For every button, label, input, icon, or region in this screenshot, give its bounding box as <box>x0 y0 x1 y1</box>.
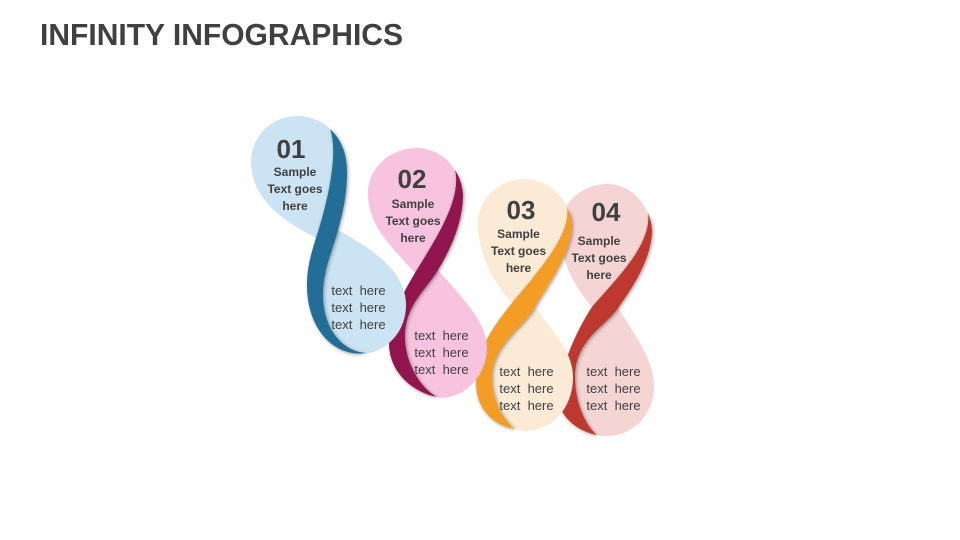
number 04: 04 <box>592 197 621 227</box>
body text 01 <box>331 283 386 332</box>
infinity 01 <box>251 116 406 354</box>
number 01: 01 <box>277 134 305 164</box>
heading 04: here <box>586 268 612 282</box>
heading 03: here <box>506 261 531 275</box>
body text 03: text here <box>499 364 554 379</box>
heading 02 <box>385 197 441 245</box>
number 03: 03 <box>507 195 535 225</box>
upper lobe 04 <box>560 184 648 307</box>
band 04 <box>559 213 652 435</box>
body text 03: text here <box>499 381 554 396</box>
body text 02: text here <box>414 345 469 360</box>
heading 04 <box>571 234 627 282</box>
heading 04: Sample <box>578 234 621 248</box>
lower lobe 02 <box>402 268 487 398</box>
lower lobe 01 <box>320 228 406 354</box>
body text 01: text here <box>331 300 386 315</box>
body text 04: text here <box>586 381 641 396</box>
upper lobe 01 <box>251 116 333 238</box>
body text 04 <box>586 364 641 413</box>
body text 03: text here <box>499 398 554 413</box>
heading 02: Sample <box>392 197 435 211</box>
heading 03: Text goes <box>491 244 546 258</box>
infinity 04 <box>559 184 654 436</box>
body text 02: text here <box>414 362 469 377</box>
heading 02: Text goes <box>385 214 441 228</box>
heading 02: here <box>400 231 426 245</box>
title: INFINITY INFOGRAPHICS <box>40 17 403 52</box>
band 02 <box>389 170 463 397</box>
heading 03: Sample <box>497 227 540 241</box>
heading 03 <box>491 227 546 275</box>
body text 04: text here <box>586 398 641 413</box>
band 03 <box>476 207 572 429</box>
body text 03 <box>499 364 554 413</box>
heading 01: Sample <box>274 165 317 179</box>
heading 01: Text goes <box>267 182 323 196</box>
infinity 02 <box>368 148 487 398</box>
body text 04: text here <box>586 364 641 379</box>
band 01 <box>307 129 367 354</box>
infinity 03 <box>476 179 573 431</box>
number 02: 02 <box>398 164 426 194</box>
upper lobe 02 <box>368 148 456 273</box>
heading 04: Text goes <box>571 251 627 265</box>
lower lobe 04 <box>572 306 654 436</box>
body text 01: text here <box>331 317 386 332</box>
upper lobe 03 <box>478 179 567 303</box>
body text 02 <box>414 328 469 377</box>
body text 01: text here <box>331 283 386 298</box>
heading 01: here <box>282 199 308 213</box>
body text 02: text here <box>414 328 469 343</box>
heading 01 <box>267 165 323 213</box>
lower lobe 03 <box>489 305 573 431</box>
